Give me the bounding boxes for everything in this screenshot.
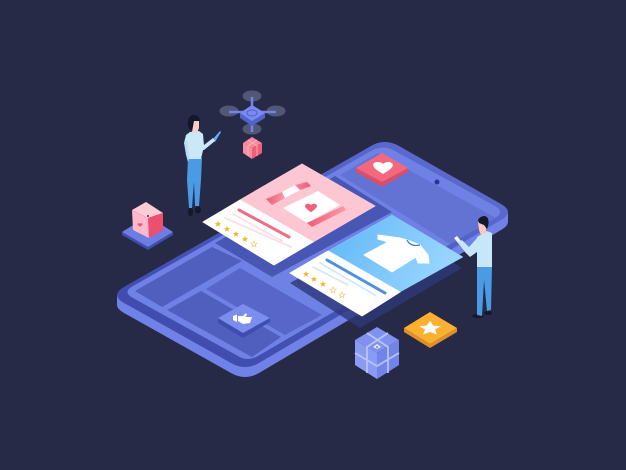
camera dot: [434, 180, 440, 184]
hair: [188, 115, 200, 130]
icon: pink box on platform: [122, 202, 173, 250]
arms: [229, 97, 276, 132]
heart on photo: [305, 204, 317, 212]
white body: [203, 200, 313, 265]
lower bottom cell: [167, 291, 281, 357]
person: woman with tablet: [184, 115, 221, 216]
body: [240, 105, 265, 126]
torso: [477, 231, 492, 267]
blue header: [328, 215, 463, 292]
arm: [458, 238, 477, 257]
text lines: [225, 210, 291, 247]
phone: [117, 142, 508, 377]
phone in hand: [454, 236, 461, 243]
package: [243, 137, 262, 148]
lower middle cell: [206, 268, 322, 335]
arm: [199, 134, 215, 150]
product card: pink: [203, 164, 375, 265]
rating stars: [303, 271, 345, 298]
shadow: blue card: [290, 225, 462, 328]
upper screen: [340, 153, 496, 244]
product card: blue: [290, 215, 463, 316]
rotors: [220, 90, 286, 134]
phone rim: [117, 142, 508, 367]
phone side: [117, 152, 508, 377]
shadow: pink card: [215, 176, 392, 277]
pink header: [240, 164, 375, 242]
hair: [478, 216, 489, 229]
trousers: [187, 158, 202, 208]
strip above photo: [266, 182, 311, 205]
trousers: [477, 267, 492, 316]
icon: heart tile: [356, 153, 408, 187]
shoes: [472, 314, 484, 318]
white body: [290, 251, 400, 316]
red strip under photo: [307, 206, 346, 227]
shoes: [188, 208, 193, 216]
photo frame: [283, 191, 340, 223]
icon: thumbs up tile: [218, 304, 270, 338]
torso: [184, 131, 204, 159]
drone with package: [220, 90, 286, 159]
shirt collar: [407, 240, 420, 245]
rating stars: [215, 221, 257, 247]
tablet: [212, 131, 221, 142]
person: man with phone: [454, 216, 492, 318]
icon: star tile: [404, 312, 457, 348]
text lines: [313, 260, 385, 295]
neck and face: [478, 222, 486, 235]
phone frame: [128, 148, 500, 359]
icon: blue gift box: [355, 327, 399, 379]
t-shirt: [364, 235, 429, 272]
face: [192, 121, 199, 133]
lower left cell: [135, 247, 242, 307]
